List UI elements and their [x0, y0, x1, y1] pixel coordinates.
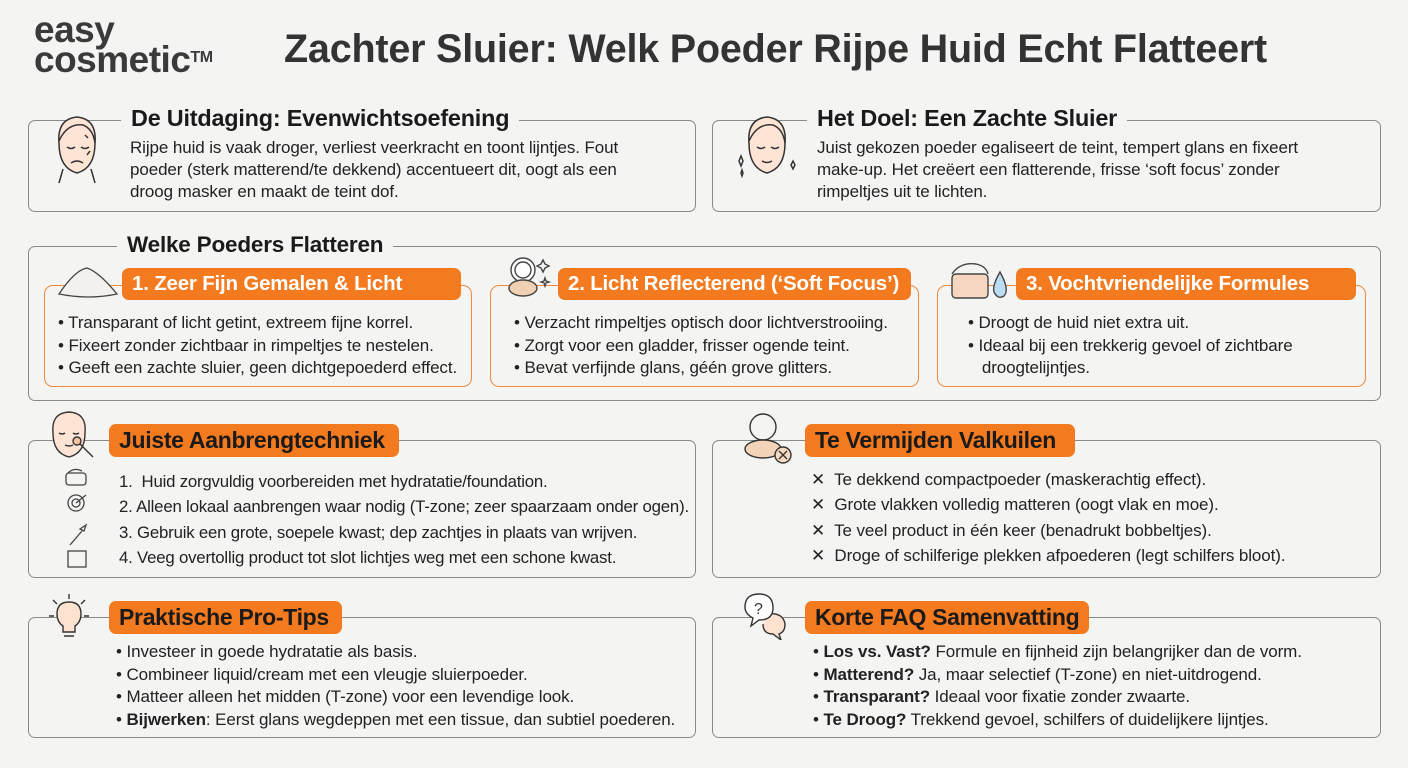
icon: speech bubbles with question: ? — [754, 601, 763, 618]
logo: cosmeticTM — [34, 39, 213, 80]
bullets: Investeer in goede hydratatie als basis. — [126, 642, 417, 661]
bullets: Los vs. Vast? Formule en fijnheid zijn belangrijker dan de vorm. — [823, 642, 1302, 661]
panel: de uitdaging — [28, 120, 696, 212]
icon: cream jar and drop — [951, 263, 1007, 299]
bullets: Droogt de huid niet extra uit. — [978, 313, 1189, 332]
bullets — [968, 313, 1293, 377]
bullets: Fixeert zonder zichtbaar in rimpeltjes te nestelen. — [68, 336, 434, 354]
card 3 — [937, 285, 1366, 387]
list: ✕ Te veel product in één keer (benadrukt bobbeltjes). — [811, 521, 1212, 540]
panel: korte faq samenvatting — [712, 617, 1381, 738]
tab: Juiste Aanbrengtechniek — [119, 427, 385, 453]
bullets: Bijwerken: Eerst glans wegdeppen met een tissue, dan subtiel poederen. — [126, 710, 675, 728]
bullets — [116, 642, 675, 728]
tab — [558, 268, 911, 300]
bullets: Matterend? Ja, maar selectief (T-zone) en niet-uitdrogend. — [823, 664, 1262, 684]
panel: praktische pro-tips — [28, 617, 696, 738]
text: Juist gekozen poeder egaliseert de teint, tempert glans en fixeert — [817, 138, 1298, 157]
heading: De Uitdaging: Evenwichtsoefening — [131, 105, 509, 131]
bullets: Transparant of licht getint, extreem fijne korrel. — [68, 313, 413, 332]
tab: 1. Zeer Fijn Gemalen & Licht — [132, 272, 402, 295]
panel: te vermijden valkuilen — [712, 440, 1381, 578]
icon: compact — [508, 257, 551, 297]
card 2 — [490, 285, 919, 387]
text: poeder (sterk matterend/te dekkend) accentueert dit, oogt als een — [130, 160, 617, 179]
title: Zachter Sluier: Welk Poeder Rijpe Huid Echt Flatteert — [284, 27, 1267, 71]
bullets — [814, 642, 1302, 728]
icon: face with lines — [58, 116, 96, 184]
icon: powder pile — [58, 267, 118, 298]
icon: face with brush — [52, 411, 94, 458]
list: ✕ Droge of schilferige plekken afpoederen (legt schilfers bloot). — [811, 546, 1285, 565]
steps — [119, 472, 689, 567]
card 1 — [44, 285, 472, 387]
bullets: Bevat verfijnde glans, géén grove glitters. — [524, 358, 832, 377]
icon: speech bubbles with question — [744, 593, 786, 640]
list: ✕ Grote vlakken volledig matteren (oogt vlak en moe). — [811, 495, 1219, 514]
bullets: Zorgt voor een gladder, frisser ogende teint. — [524, 336, 850, 354]
bullets: Te Droog? Trekkend gevoel, schilfers of duidelijkere lijntjes. — [823, 710, 1269, 728]
tab: Korte FAQ Samenvatting — [815, 604, 1079, 630]
bullets: Ideaal bij een trekkerig gevoel of zichtbare — [978, 336, 1293, 354]
logo: easy — [34, 9, 114, 50]
bullets: Verzacht rimpeltjes optisch door lichtverstrooiing. — [524, 313, 888, 332]
list: ✕ Te dekkend compactpoeder (maskerachtig effect). — [811, 470, 1206, 489]
steps: 1. Huid zorgvuldig voorbereiden met hydratatie/foundation. — [119, 472, 548, 491]
tab: 2. Licht Reflecterend (‘Soft Focus’) — [568, 272, 899, 295]
bullets: Geeft een zachte sluier, geen dichtgepoederd effect. — [68, 358, 457, 377]
steps: 2. Alleen lokaal aanbrengen waar nodig (T-zone; zeer spaarzaam onder ogen). — [119, 497, 689, 516]
tab: Te Vermijden Valkuilen — [815, 427, 1056, 453]
tab: Praktische Pro-Tips — [119, 604, 329, 630]
heading: Het Doel: Een Zachte Sluier — [817, 105, 1117, 131]
steps: 3. Gebruik een grote, soepele kwast; dep zachtjes in plaats van wrijven. — [119, 523, 637, 542]
icon: calm face with sparkles — [738, 116, 796, 178]
logo — [34, 9, 213, 80]
tab: 3. Vochtvriendelijke Formules — [1026, 272, 1309, 295]
bullets: droogtelijntjes. — [982, 358, 1090, 377]
bullets — [58, 313, 457, 377]
bullets: Combineer liquid/cream met een vleugje sluierpoeder. — [126, 664, 528, 684]
text — [817, 138, 1298, 201]
tab — [122, 268, 461, 300]
text: make-up. Het creëert een flatterende, frisse ‘soft focus’ zonder — [817, 160, 1280, 179]
heading: Welke Poeders Flatteren — [127, 232, 383, 257]
text: droog masker en maakt de teint dof. — [130, 182, 399, 201]
text: rimpeltjes uit te lichten. — [817, 182, 987, 201]
panel: welke poeders flatteren — [28, 246, 1381, 401]
bullets — [514, 313, 888, 377]
icons: steps — [65, 468, 88, 568]
text — [130, 138, 618, 201]
icon: compact with x — [744, 413, 792, 464]
bullets: Transparant? Ideaal voor fixatie zonder zwaarte. — [823, 687, 1190, 706]
panel: juiste aanbrengtechniek — [28, 440, 696, 578]
steps: 4. Veeg overtollig product tot slot lichtjes weg met een schone kwast. — [119, 548, 616, 567]
icon: lightbulb — [49, 594, 89, 637]
bullets: Matteer alleen het midden (T-zone) voor een levendige look. — [126, 687, 574, 706]
list — [811, 470, 1285, 565]
panel: het doel — [712, 120, 1381, 212]
tab — [1016, 268, 1356, 300]
text: Rijpe huid is vaak droger, verliest veerkracht en toont lijntjes. Fout — [130, 138, 618, 157]
